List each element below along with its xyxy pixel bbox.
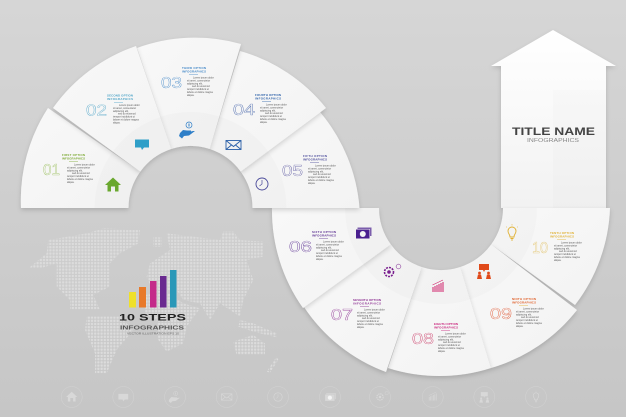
icon: clock [256,178,268,190]
step 03 text: Lorem ipsum dolor [193,76,214,80]
step 05 text: FIFTH OPTION [303,154,327,158]
step 07 text [331,298,385,329]
step 03 text: 03 [161,75,182,92]
step 01 text: Lorem ipsum dolor [74,164,95,166]
step 01 text: INFOGRAPHICS [62,156,85,160]
step 04 text: tempor incididunt ut [260,115,282,118]
step 09 text: tempor incididunt ut [516,319,538,322]
step 08 text: EIGHTH OPTION [434,322,458,326]
step 06 text: sed do eiusmod [321,249,339,252]
step 04 text: INFOGRAPHICS [255,96,281,100]
step 05 text: 05 [282,163,303,180]
step 05 text: aliqua. [308,182,316,185]
step 07 text: sed do eiusmod [362,317,380,320]
step 06 text [289,230,344,261]
panel: step 9 [460,244,577,368]
rising bar chart logo [129,270,176,308]
step 10 text: INFOGRAPHICS [550,234,574,238]
step 03 text [161,66,214,97]
step 10 text: labore et dolore magna [554,256,580,259]
step 01 text: 01 [43,162,60,179]
icon: chart [432,280,444,292]
panel: step 7 [304,244,422,372]
panel: step 10 [491,208,610,305]
step 09 text: labore et dolore magna [516,322,542,325]
icon: team [477,264,491,279]
step 10 text: 10 [532,240,548,257]
heading: 10 steps infographics: VECTOR ILLUSTRATION EPS 10 [127,332,180,336]
step 08 text: labore et dolore magna [438,347,464,350]
step 10 text [532,231,582,262]
step 05 text: adipiscing elit, [308,170,324,173]
step 10 text: tempor incididunt ut [554,253,576,256]
step 07 text: INFOGRAPHICS [353,301,381,305]
step 09 text [490,297,544,328]
step 01 text: adipiscing elit, [67,169,83,172]
step 04 text: Lorem ipsum dolor [266,104,287,106]
step 04 text: aliqua. [260,121,268,124]
step 06 text: tempor incididunt ut [316,252,338,255]
step 09 text: NINTH OPTION [512,297,536,301]
step 01 text: aliqua. [67,181,75,184]
panel: step 3 [137,38,241,149]
step 02 text: aliqua. [113,121,121,124]
step 06 text: labore et dolore magna [316,255,342,258]
step 09 text: Lorem ipsum dolor [523,308,544,310]
step 01 text: FIRST OPTION [62,153,85,157]
panel: step 2 [53,46,171,172]
step 04 text: labore et dolore magna [260,118,286,121]
arrow title: TITLE NAME [512,126,595,138]
step 10 text: adipiscing elit, [554,247,570,250]
panel: step 1 [21,108,140,208]
step 04 text: sit amet, consectetur [260,106,283,109]
step 08 text: sit amet, consectetur [438,335,461,338]
step 03 text: sit amet, consectetur [187,79,210,82]
step 04 text: FOURTH OPTION [255,93,281,97]
step 02 text [86,94,140,124]
step 01 text: sed do eiusmod [72,172,90,175]
panel: step 8 [388,267,491,376]
step 05 text: Lorem ipsum dolor [315,164,336,168]
step 03 text: aliqua. [187,94,195,97]
step 03 text: THIRD OPTION [182,66,206,70]
heading: 10 steps infographics: INFOGRAPHICS [120,326,184,332]
step 02 text: INFOGRAPHICS [107,97,133,101]
step 03 text: labore et dolore magna [187,91,213,94]
step 03 text: sed do eiusmod [192,85,210,88]
step 08 text: tempor incididunt ut [438,344,460,347]
step 07 text: Lorem ipsum dolor [364,308,385,312]
step 07 text: adipiscing elit, [357,314,373,317]
step 08 text: Lorem ipsum dolor [445,332,466,336]
step 06 text: SIXTH OPTION [312,230,336,234]
icon: gear [384,264,401,276]
step 05 text: sed do eiusmod [313,173,331,176]
step 10 text: aliqua. [554,259,562,262]
step 02 text: tempor incididunt ut [113,116,135,119]
step 07 text: tempor incididunt ut [357,320,379,323]
step 10 text: TENTH OPTION [550,231,574,235]
step 04 text: 04 [233,102,255,119]
step 04 text: adipiscing elit, [260,109,276,112]
step 07 text: sit amet, consectetur [357,311,380,314]
step 01 text: labore et dolore magna [67,178,93,181]
step 07 text: aliqua. [357,326,365,329]
panel: step 5 [241,112,360,208]
step 02 text: adipiscing elit, [113,110,129,113]
step 03 text: INFOGRAPHICS [182,69,206,73]
step 09 text: INFOGRAPHICS [512,300,536,304]
step 07 text: SEVENTH OPTION [353,298,381,302]
step 09 text: adipiscing elit, [516,313,532,316]
step 10 text: sit amet, consectetur [554,244,577,247]
step 05 text: tempor incididunt ut [308,176,330,179]
heading: 10 steps infographics [119,312,186,336]
icon: hand with coin [179,122,195,138]
step 01 text: sit amet, consectetur [67,166,90,169]
icon: chat bubble [135,140,149,150]
step 02 text: SECOND OPTION [107,94,133,98]
step 02 text: 02 [86,102,107,120]
icon: home [105,178,121,192]
step 02 text: sed do eiusmod [118,113,136,116]
step 09 text: 09 [490,306,512,323]
heading: 10 steps infographics: 10 STEPS [119,312,186,324]
step 07 text: 07 [331,307,353,324]
dotted world map [30,228,278,373]
step 08 text [412,322,466,353]
step 10 text: Lorem ipsum dolor [561,242,582,244]
step 05 text [282,154,336,185]
step 01 text [43,153,95,184]
step 05 text: INFOGRAPHICS [303,157,327,161]
step 07 text: labore et dolore magna [357,323,383,326]
bottom icon row [61,386,546,408]
step 03 text: tempor incididunt ut [187,88,209,91]
step 01 text: tempor incididunt ut [67,175,89,178]
step 02 text: Lorem ipsum dolor [119,104,140,107]
step 09 text: sed do eiusmod [521,316,539,319]
icon: bulb [506,224,518,240]
step 03 text: adipiscing elit, [187,82,203,85]
step 06 text: INFOGRAPHICS [312,233,336,237]
arrow [491,30,616,208]
panel: step 4 [210,51,326,172]
step 02 text: labore et dolore magna [113,118,139,122]
step 06 text: adipiscing elit, [316,246,332,249]
step 10 text: sed do eiusmod [559,250,577,253]
icon: envelope [226,140,241,150]
icon: money [356,228,372,238]
step 06 text: aliqua. [316,258,324,261]
step 08 text: aliqua. [438,350,446,353]
step 06 text: 06 [289,239,312,256]
step 05 text: labore et dolore magna [308,179,334,182]
arrow subtitle: INFOGRAPHICS [527,138,579,144]
step 09 text: aliqua. [516,325,524,328]
panel: step 6 [272,208,391,308]
step 04 text: sed do eiusmod [265,112,283,115]
step 08 text: INFOGRAPHICS [434,325,458,329]
step 08 text: 08 [412,331,434,348]
step 09 text: sit amet, consectetur [516,310,539,313]
step 05 text: sit amet, consectetur [308,167,331,170]
step 08 text: adipiscing elit, [438,338,454,341]
step 06 text: Lorem ipsum dolor [323,240,344,244]
step 08 text: sed do eiusmod [443,341,461,344]
step 06 text: sit amet, consectetur [316,243,339,246]
step 04 text [233,93,287,124]
step 02 text: sit amet, consectetur [113,107,136,110]
